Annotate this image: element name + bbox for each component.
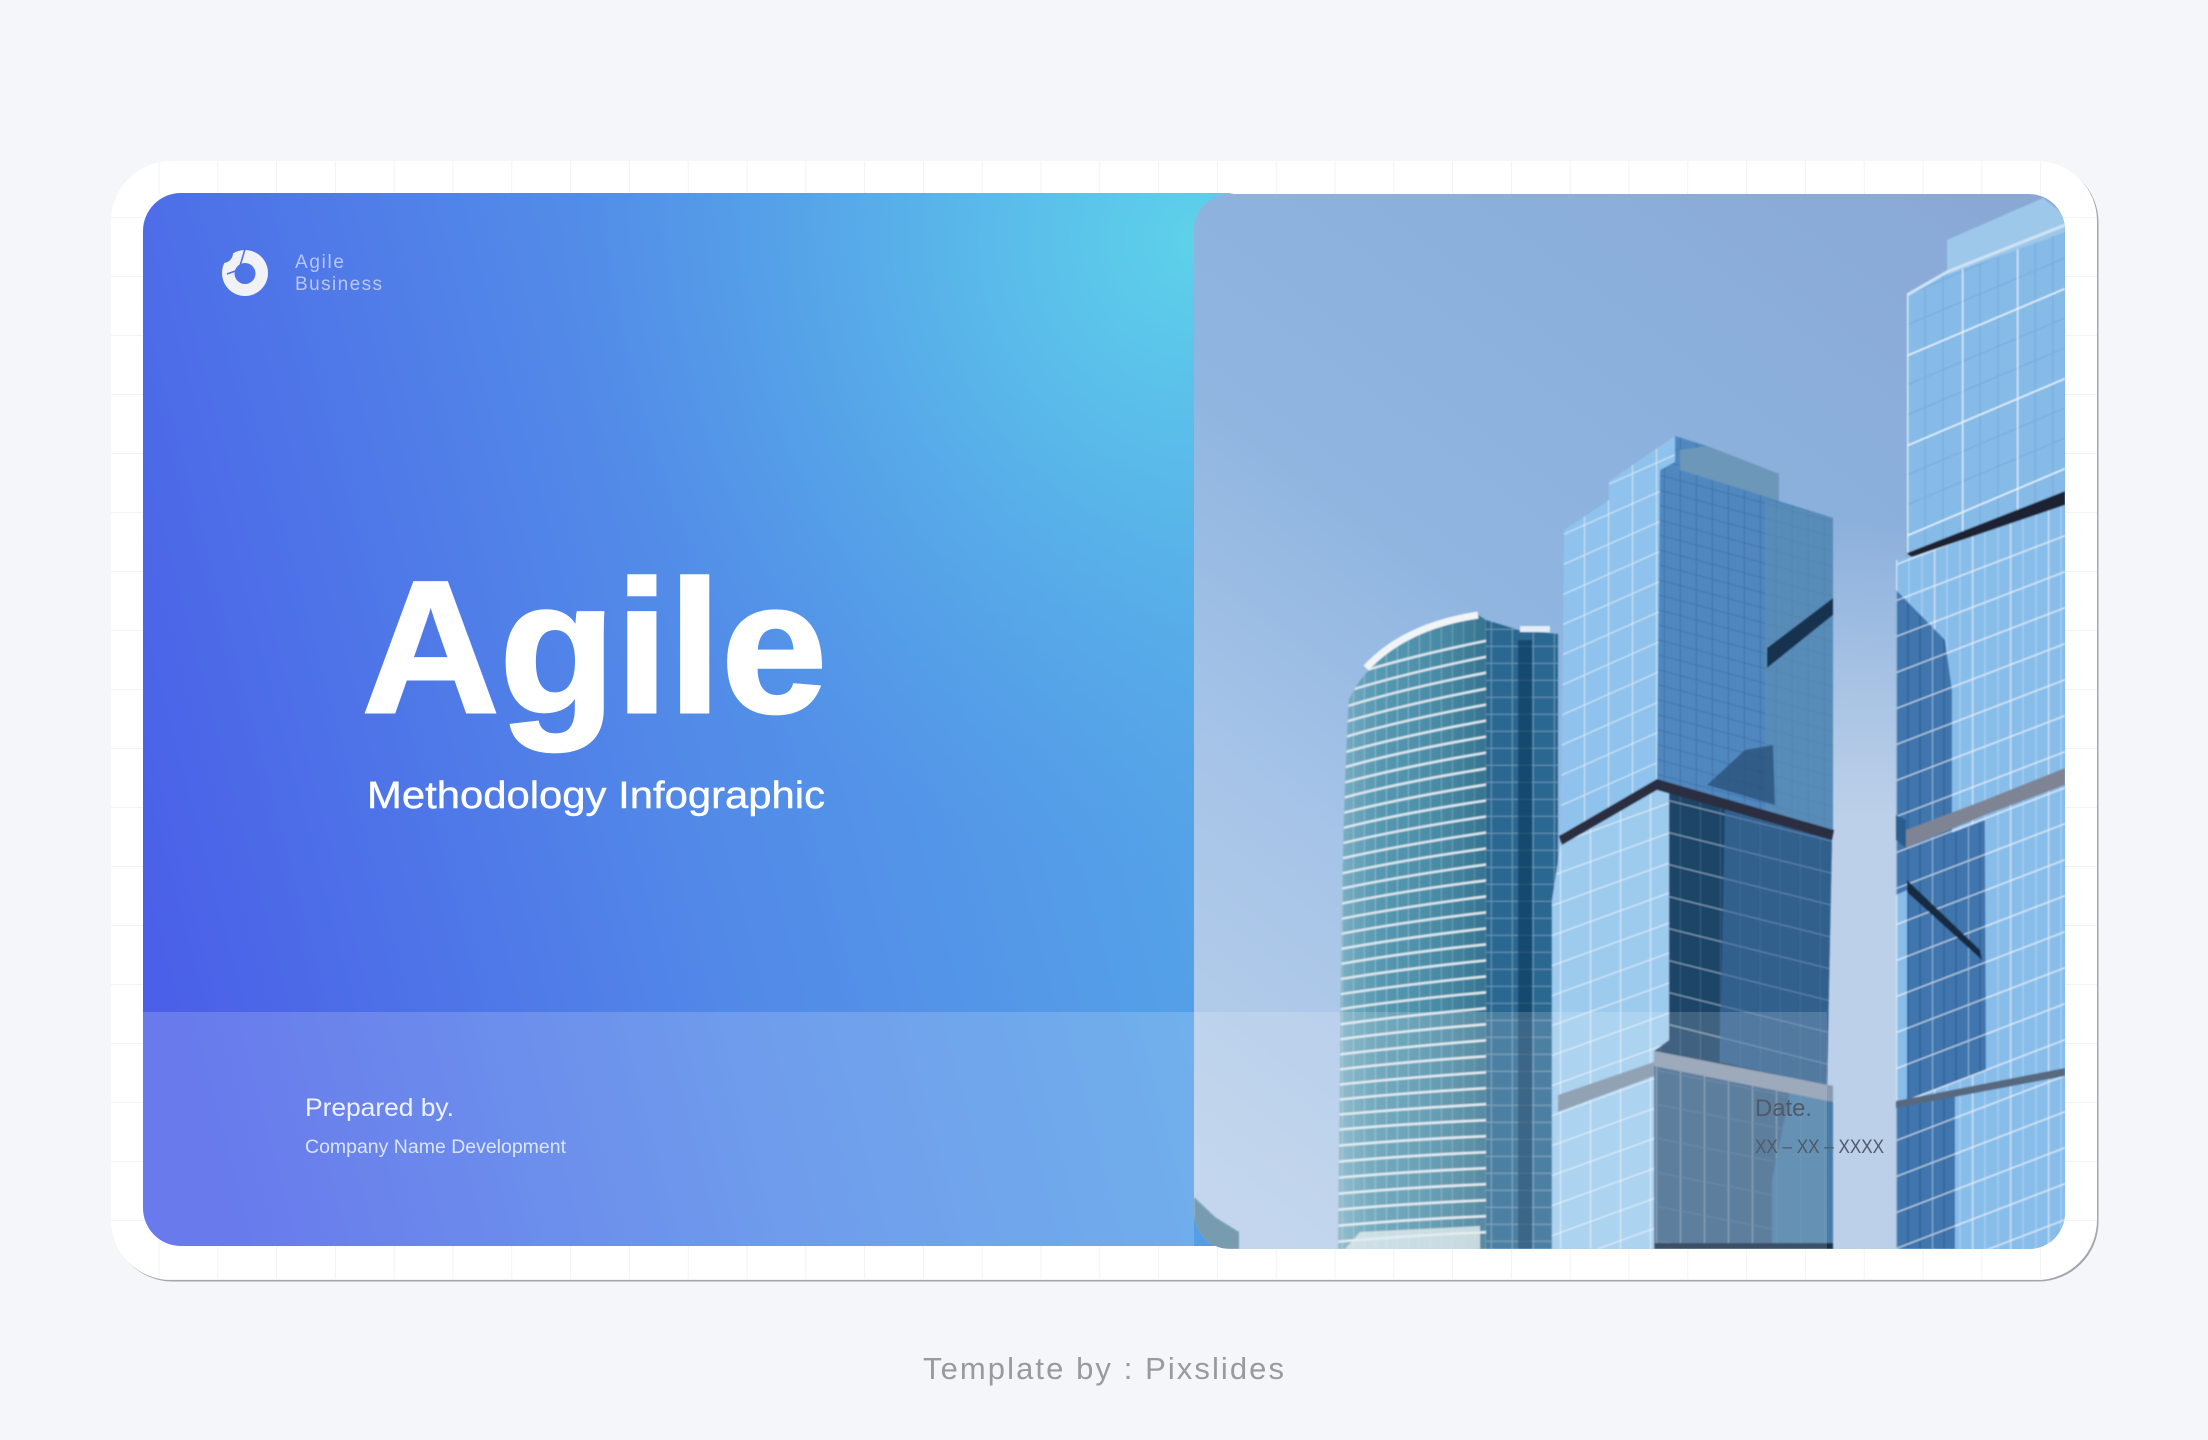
- icon: ring logo: [222, 250, 268, 296]
- panel: blue gradient cover: [143, 193, 1263, 1246]
- prepared by text: Company Name Development: [305, 1137, 567, 1158]
- building: central tower upper: [1561, 436, 1833, 839]
- sky gap between towers: [1826, 570, 1896, 1249]
- subtitle: Methodology Infographic: [367, 775, 825, 817]
- building: round tower: [1335, 610, 1558, 1250]
- rooftop curve: [1366, 615, 1478, 668]
- sky: [1194, 194, 2065, 1249]
- footer band overlay: [143, 1012, 1194, 1246]
- logo text: Agile: [295, 252, 344, 273]
- side wing: [1486, 620, 1558, 1249]
- building: right tower lower: [1896, 505, 2065, 1250]
- white card: [111, 161, 2098, 1282]
- building: central tower lower: [1552, 779, 1834, 1100]
- date text: XX – XX – XXXX: [1755, 1137, 1884, 1158]
- building: right tower upper: [1907, 198, 2065, 560]
- buildings: [1194, 198, 2065, 1250]
- photo: glass skyscrapers: [1194, 194, 2065, 1250]
- logo text: [295, 252, 382, 295]
- building: central tower base: [1552, 1051, 1833, 1249]
- date text: [1756, 1100, 1884, 1153]
- date text: Date.: [1755, 1095, 1812, 1122]
- building: small distant: [1194, 1197, 1239, 1249]
- footer credit: Template by : Pixslides: [923, 1351, 1284, 1386]
- overlay band on photo: [1194, 1012, 1827, 1249]
- logo: [222, 250, 382, 296]
- prepared by text: Prepared by.: [305, 1094, 454, 1122]
- title: Agile: [362, 542, 827, 752]
- prepared by text: [305, 1094, 567, 1158]
- seam: [1559, 779, 1834, 845]
- logo text: Business: [295, 274, 382, 295]
